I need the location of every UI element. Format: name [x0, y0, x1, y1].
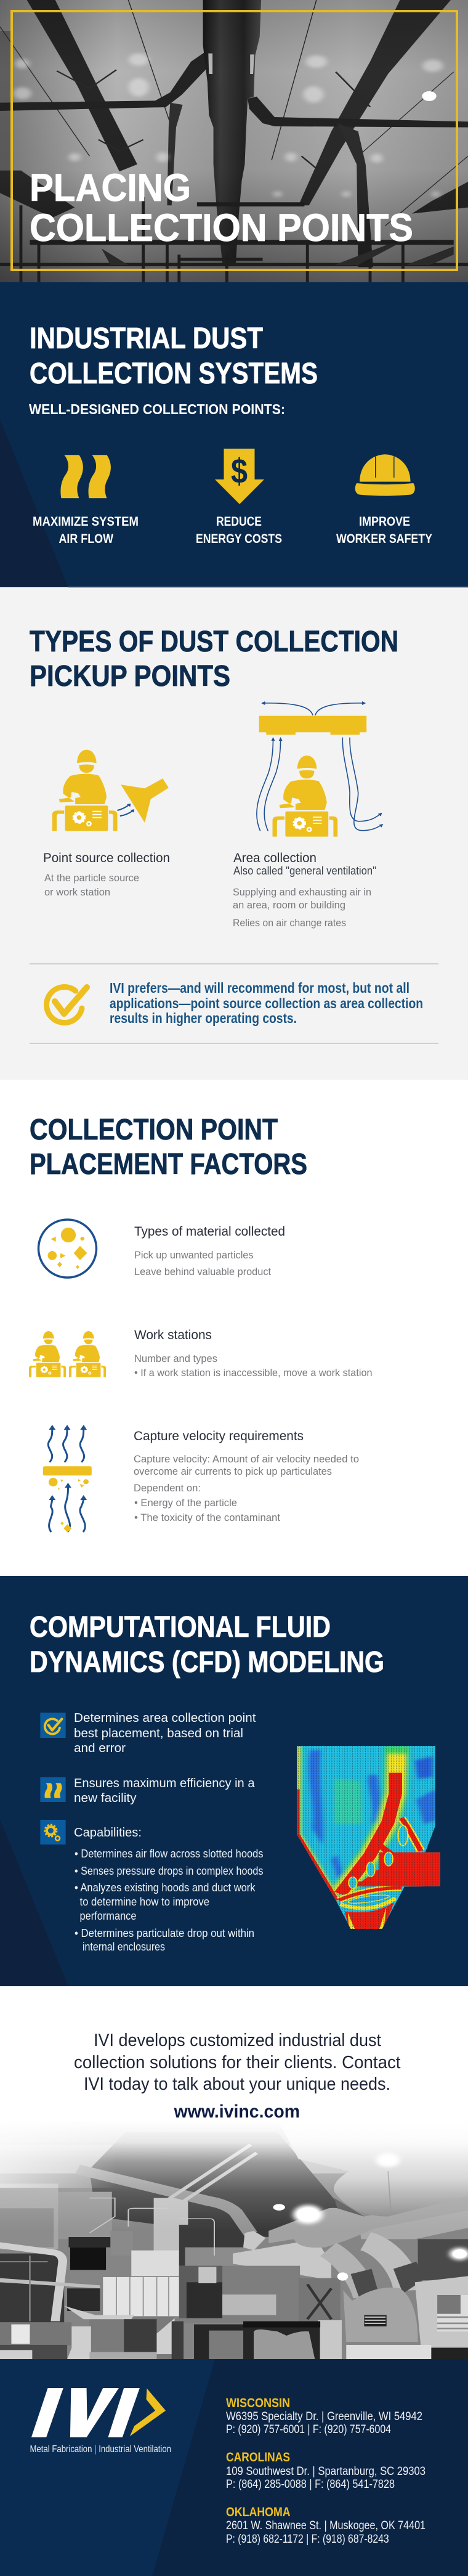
- text: work stations: [134, 1328, 372, 1379]
- text: area collection: Also called "general ventilation": [233, 865, 376, 877]
- text: capture velocity: • Energy of the particle: [134, 1497, 237, 1509]
- text: types of material: Pick up unwanted particles: [134, 1249, 254, 1261]
- address: Carolinas: CAROLINAS: [226, 2450, 290, 2464]
- text: capabilities list: performance: [80, 1910, 137, 1922]
- text: determines placement: Determines area collection point: [74, 1711, 256, 1725]
- heading: [30, 1611, 384, 1679]
- icon: hard hat: [355, 454, 415, 496]
- label: maximize system air flow: AIR FLOW: [59, 532, 113, 546]
- icon: check box: [40, 1713, 66, 1738]
- label: reduce energy costs: [196, 515, 282, 546]
- text: point source collection: At the particle source: [44, 872, 139, 884]
- text: area collection: Relies on air change rates: [233, 917, 346, 929]
- label: reduce energy costs: ENERGY COSTS: [196, 532, 282, 546]
- text: capabilities list: • Senses pressure drops in complex hoods: [75, 1865, 264, 1877]
- address: Carolinas: [226, 2450, 426, 2491]
- panel: hero photo header: [0, 0, 468, 282]
- panel: call to action with photo: [0, 1986, 468, 2359]
- text: maximum efficiency: Ensures maximum efficiency in a: [74, 1777, 255, 1790]
- text: capture velocity: • The toxicity of the contaminant: [134, 1512, 280, 1523]
- text: capabilities list: • Analyzes existing hoods and duct work: [75, 1881, 256, 1894]
- label: maximize system air flow: [33, 515, 139, 546]
- heading: COLLECTION SYSTEMS: [30, 357, 318, 390]
- icon: capture velocity: [43, 1425, 92, 1533]
- heading: TYPES OF DUST COLLECTION: [30, 626, 398, 658]
- text: contact message: collection solutions for their clients. Contact: [74, 2053, 400, 2073]
- title: [30, 166, 413, 250]
- icon: waves box: [40, 1777, 66, 1802]
- text: determines placement: best placement, based on trial: [74, 1727, 243, 1740]
- text: point source collection: Point source collection: [43, 851, 170, 865]
- label: improve worker safety: IMPROVE: [359, 515, 410, 529]
- chart texture: vector arrows overlay: [297, 1746, 440, 1929]
- label: improve worker safety: WORKER SAFETY: [336, 532, 432, 546]
- heading: COLLECTION POINT: [30, 1114, 278, 1146]
- heading: [30, 1114, 307, 1181]
- text: area collection: Supplying and exhausting air in: [233, 886, 371, 898]
- address: Wisconsin: P: (920) 757-6001 | F: (920) 757-6004: [226, 2423, 391, 2436]
- title: COLLECTION POINTS: [30, 206, 413, 250]
- text: capabilities list: [74, 1826, 264, 1953]
- heading: PLACEMENT FACTORS: [30, 1148, 307, 1181]
- label: maximize system air flow: MAXIMIZE SYSTEM: [33, 515, 139, 529]
- chart: CFD airflow simulation: [292, 1744, 445, 1931]
- icon: particles in circle: [38, 1220, 96, 1278]
- text: types of material: Leave behind valuable product: [134, 1266, 271, 1278]
- text: capabilities list: to determine how to improve: [80, 1896, 209, 1908]
- heading: PICKUP POINTS: [30, 660, 230, 693]
- panel: footer: [0, 2359, 468, 2576]
- text: point source collection: [43, 851, 170, 898]
- text: maximum efficiency: [74, 1777, 255, 1805]
- yellow frame: [12, 11, 457, 270]
- text: work stations: Number and types: [134, 1353, 217, 1364]
- address: Carolinas: P: (864) 285-0088 | F: (864) 541-7828: [226, 2478, 395, 2491]
- illustration: area collection: [257, 701, 383, 837]
- text: work stations: Work stations: [134, 1328, 212, 1342]
- heading: DYNAMICS (CFD) MODELING: [30, 1646, 384, 1679]
- address: Oklahoma: P: (918) 682-1172 | F: (918) 687-8243: [226, 2533, 389, 2546]
- text: area collection: an area, room or building: [233, 899, 345, 911]
- callout: IVI preference: results in higher operating costs.: [110, 1010, 297, 1026]
- text: area collection: [233, 851, 376, 929]
- subheading: WELL-DESIGNED COLLECTION POINTS:: [29, 401, 285, 417]
- address: Wisconsin: [226, 2396, 422, 2436]
- callout: IVI preference: [110, 980, 423, 1026]
- factory photo: [0, 2120, 468, 2359]
- text: capture velocity: overcome air currents to pick up particulates: [134, 1465, 332, 1477]
- heading: COMPUTATIONAL FLUID: [30, 1611, 331, 1644]
- text: types of material: Types of material collected: [134, 1225, 285, 1239]
- text: contact message: IVI today to talk about your unique needs.: [84, 2074, 390, 2094]
- icon: down arrow with dollar: $: [231, 452, 248, 491]
- text: point source collection: or work station: [44, 886, 110, 898]
- callout: IVI preference: IVI prefers—and will recommend for most, but not all: [110, 980, 410, 996]
- panel: industrial dust collection systems: [0, 282, 468, 588]
- icon: air flow waves: [60, 455, 111, 498]
- title: PLACING: [30, 166, 191, 210]
- logo: IVI: [31, 2388, 166, 2437]
- text: types of material: [134, 1225, 285, 1278]
- heading: INDUSTRIAL DUST: [30, 322, 263, 355]
- address: Oklahoma: OKLAHOMA: [226, 2505, 291, 2519]
- heading: [30, 626, 398, 693]
- text: maximum efficiency: new facility: [74, 1791, 137, 1805]
- text: capture velocity: Capture velocity: Amount of air velocity needed to: [134, 1453, 359, 1465]
- panel: types of pickup points: [0, 588, 468, 1080]
- text: area collection: Area collection: [233, 851, 317, 865]
- text: capabilities list: Capabilities:: [74, 1826, 142, 1840]
- text: determines placement: and error: [74, 1742, 126, 1755]
- label: reduce energy costs: REDUCE: [216, 515, 262, 529]
- illustration: point source collection: [52, 750, 169, 831]
- icon: gears box: [40, 1820, 66, 1844]
- text: capture velocity: Capture velocity requirements: [134, 1429, 304, 1443]
- text: capture velocity: Dependent on:: [134, 1482, 201, 1494]
- text: contact message: IVI develops customized industrial dust: [94, 2031, 381, 2050]
- text: capabilities list: internal enclosures: [83, 1941, 165, 1953]
- address: Carolinas: 109 Southwest Dr. | Spartanburg, SC 29303: [226, 2465, 426, 2478]
- text: work stations: • If a work station is inaccessible, move a work station: [134, 1367, 372, 1379]
- text: capabilities list: • Determines air flow across slotted hoods: [75, 1848, 264, 1860]
- text: determines placement: [74, 1711, 256, 1755]
- icon: two workers: [29, 1331, 106, 1377]
- heading: [30, 322, 318, 390]
- panel: CFD modeling: [0, 1576, 468, 1986]
- tagline: Metal Fabrication | Industrial Ventilation: [30, 2444, 171, 2455]
- text: capabilities list: • Determines particulate drop out within: [75, 1927, 254, 1939]
- text: contact message: [74, 2031, 400, 2094]
- hero photo of ducts: [0, 0, 468, 282]
- label: improve worker safety: [336, 515, 432, 546]
- address: Wisconsin: W6395 Specialty Dr. | Greenville, WI 54942: [226, 2410, 422, 2423]
- address: Oklahoma: 2601 W. Shawnee St. | Muskogee, OK 74401: [226, 2519, 426, 2532]
- text: capture velocity: [134, 1429, 359, 1523]
- icon: down arrow with dollar: [215, 449, 264, 504]
- address: Oklahoma: [226, 2505, 426, 2546]
- panel: placement factors: [0, 1080, 468, 1576]
- icon: check mark badge: [47, 987, 87, 1023]
- address: Wisconsin: WISCONSIN: [226, 2396, 290, 2410]
- text: website: www.ivinc.com: [174, 2101, 300, 2122]
